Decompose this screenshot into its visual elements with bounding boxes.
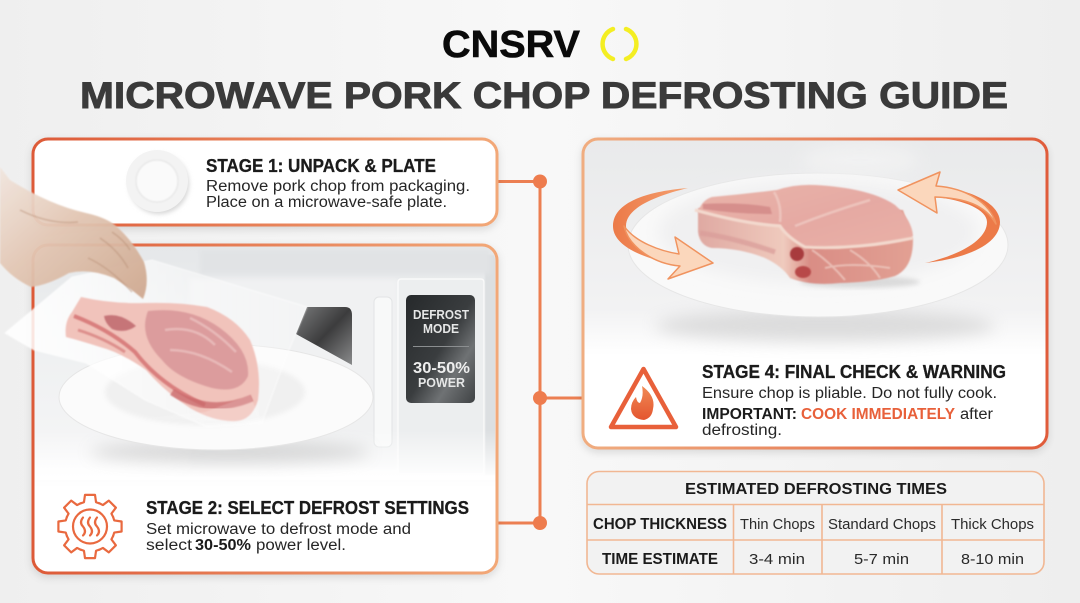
defrost display <box>406 295 475 403</box>
defrost display: MODE <box>423 322 459 336</box>
vacuum bag, chop and gloved hand <box>0 167 307 427</box>
stage 2 body: select <box>146 537 193 554</box>
row: chop thickness: Thin Chops <box>740 516 815 533</box>
stage 4 heading: STAGE 4: FINAL CHECK & WARNING <box>702 362 1006 382</box>
microwave window <box>296 307 352 365</box>
panel: stage 2 <box>33 245 498 573</box>
vacuum bag <box>5 260 307 427</box>
row: chop thickness: CHOP THICKNESS <box>593 516 727 533</box>
defrost display: POWER <box>418 376 465 390</box>
logo wordmark: CNSRV <box>442 24 581 66</box>
stage 4 body: COOK IMMEDIATELY <box>801 406 956 423</box>
arrow: rotation right <box>898 172 1000 263</box>
icon: plate <box>126 150 189 214</box>
panel: stage 4 <box>583 139 1047 448</box>
row: time estimate: 5-7 min <box>854 551 909 568</box>
defrost display: 30-50% <box>413 360 470 377</box>
stage 4 body: IMPORTANT: <box>702 406 797 423</box>
photo: plate and chop <box>613 171 1008 346</box>
gloved hand <box>0 167 147 299</box>
icon: yellow ring <box>603 29 636 59</box>
stage 2 body: power level. <box>256 537 346 554</box>
pork chop <box>66 297 262 423</box>
stage 1 body <box>206 178 470 211</box>
stage 2 heading: STAGE 2: SELECT DEFROST SETTINGS <box>146 498 469 518</box>
row: chop thickness: Standard Chops <box>828 516 936 533</box>
pork chop top <box>698 185 913 247</box>
stage 2 body <box>146 521 411 554</box>
icon: gear with heat waves <box>58 495 122 558</box>
row: chop thickness: Thick Chops <box>951 516 1034 533</box>
stage 2 body: 30-50% <box>195 537 251 554</box>
pork chop side <box>698 208 913 284</box>
steam <box>800 144 920 176</box>
table heading: ESTIMATED DEFROSTING TIMES <box>685 481 947 498</box>
row: time estimate: 3-4 min <box>749 551 805 568</box>
stage 4 body: defrosting. <box>702 422 782 439</box>
stage 1 body: Remove pork chop from packaging. <box>206 178 470 195</box>
stage 2 body: Set microwave to defrost mode and <box>146 521 411 538</box>
row: time estimate: 8-10 min <box>961 551 1024 568</box>
row: time estimate <box>602 551 1024 568</box>
icon: warning triangle with flame <box>611 369 676 427</box>
stage 1 heading: STAGE 1: UNPACK & PLATE <box>206 156 436 176</box>
defrost display: DEFROST <box>413 308 469 322</box>
plate <box>628 173 1008 317</box>
panel: stage 1 <box>33 139 497 225</box>
microwave handle <box>374 297 392 447</box>
title: MICROWAVE PORK CHOP DEFROSTING GUIDE <box>80 75 1008 116</box>
plate under chop <box>59 344 373 463</box>
row: chop thickness <box>593 516 1034 533</box>
table: estimated defrosting times <box>587 472 1044 574</box>
stage 4 body <box>702 385 997 439</box>
stage 1 body: Place on a microwave-safe plate. <box>206 194 447 211</box>
connector lines <box>498 174 582 530</box>
stage 4 body: Ensure chop is pliable. Do not fully cook. <box>702 385 997 402</box>
stage 4 body: after <box>960 406 993 423</box>
row: time estimate: TIME ESTIMATE <box>602 551 718 568</box>
microwave <box>296 256 495 454</box>
logo <box>442 24 636 66</box>
arrow: rotation left <box>613 188 713 279</box>
